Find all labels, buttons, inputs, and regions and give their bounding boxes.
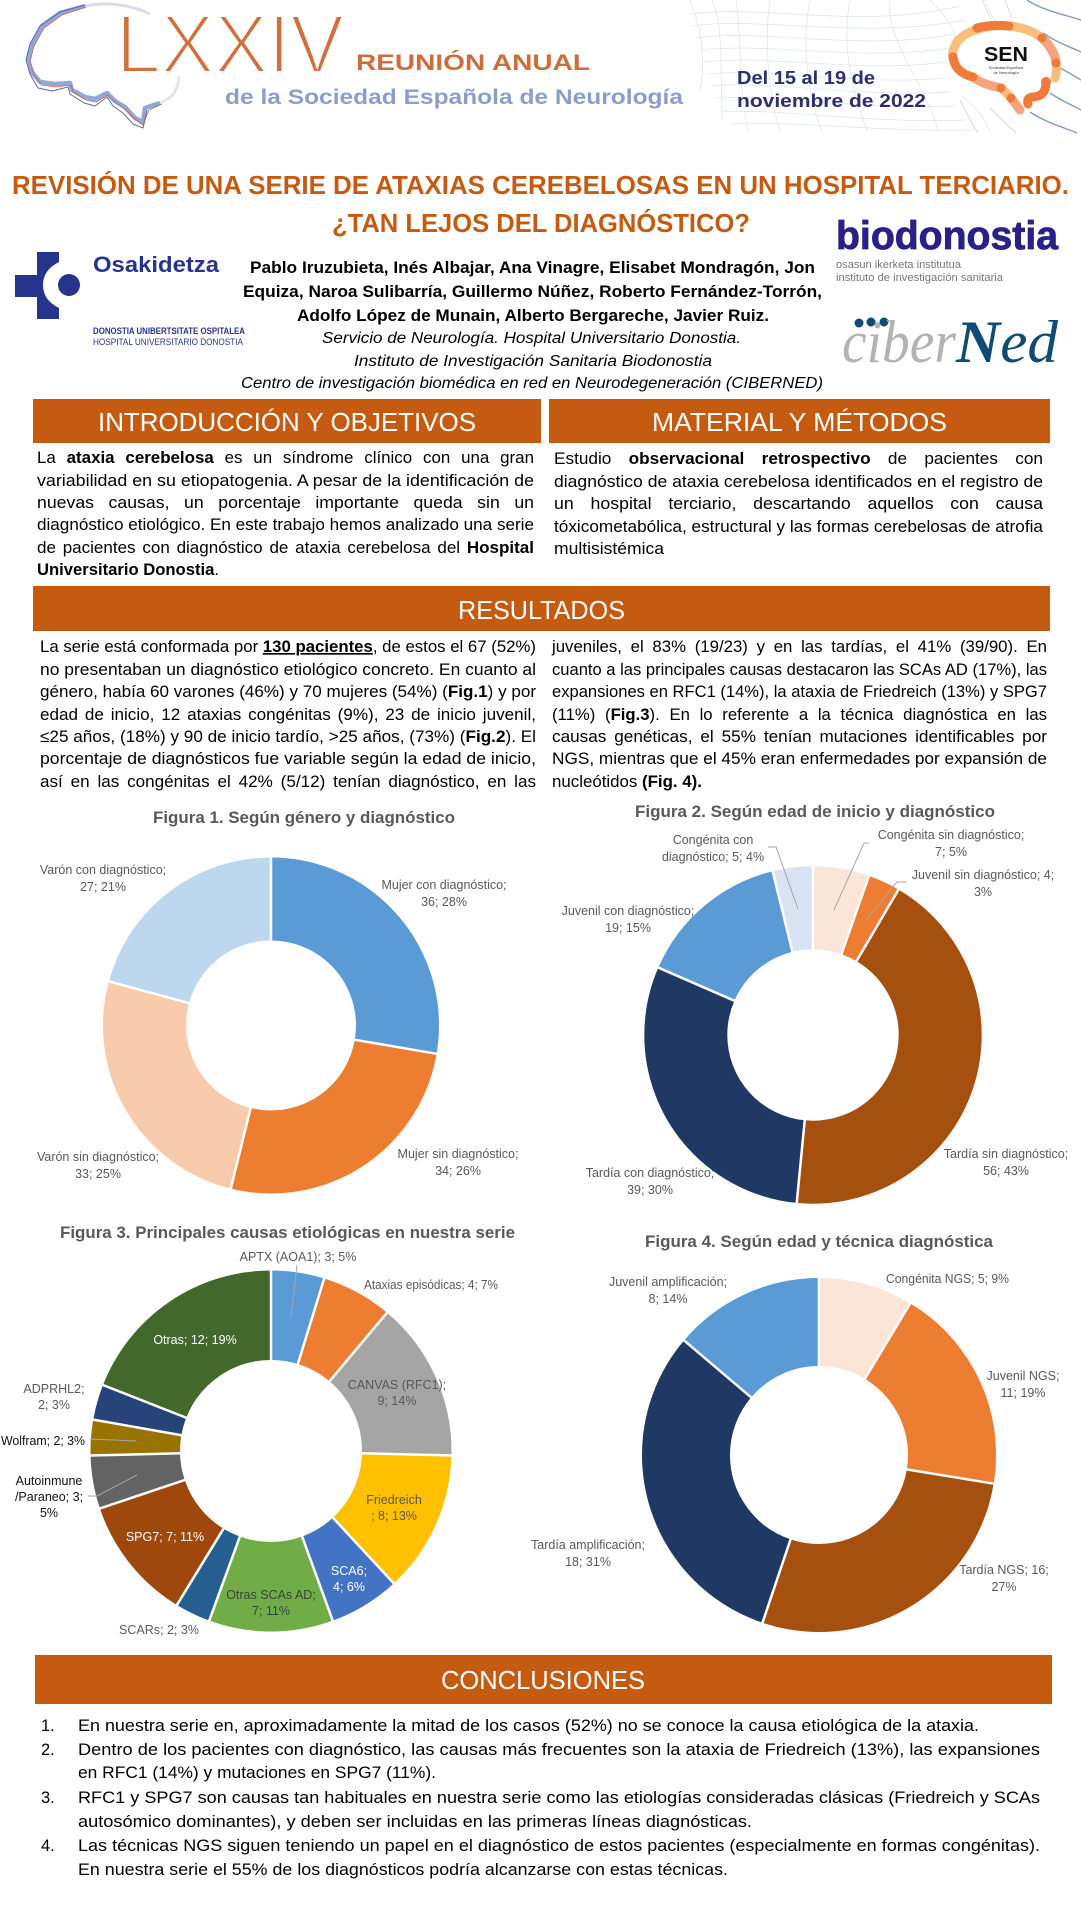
leader lines: figura 3	[88, 1265, 297, 1496]
text block: resultados right column: juveniles, el 83% (19/23) y en las tardías, el 41% (39/90). En	[551, 638, 1047, 656]
logo: SEN: de Neurología	[993, 70, 1019, 75]
conclusion 2: en RFC1 (14%) y mutaciones en SPG7 (11%).	[78, 1764, 436, 1782]
heading: introducción: INTRODUCCIÓN Y OBJETIVOS	[98, 407, 476, 437]
affiliations	[241, 330, 823, 392]
label: CANVAS: 9; 14%	[378, 1394, 416, 1408]
text block: resultados left column: así en las congénitas el 42% (5/12) tenían diagnóstico, en las	[40, 773, 536, 791]
icon: Osakidetza cross	[15, 252, 80, 319]
donut: figura 4	[683, 1277, 995, 1624]
label: SCA6: 4; 6%	[333, 1580, 365, 1594]
label: varón con diagnóstico	[40, 863, 166, 894]
text block: introducción: Universitario Donostia.	[37, 561, 219, 579]
label: tardía con diagnóstico: Tardía con diagnóstico;	[586, 1166, 714, 1180]
dates	[737, 68, 926, 111]
text block: métodos: tóxicometabólica, estructural y las formas cerebelosas de atrofia	[554, 518, 1044, 536]
logo: ciberNed: Ned	[955, 309, 1059, 375]
heading: figura 3: Figura 3. Principales causas etiológicas en nuestra serie	[60, 1223, 515, 1242]
text block: métodos: diagnóstico de ataxia cerebelosa identificados en el registro de	[554, 473, 1043, 491]
conclusion 4: 4.	[41, 1837, 55, 1855]
label: juvenil con diagnóstico	[562, 904, 694, 935]
authors	[243, 259, 822, 325]
label: tardía amplificación	[531, 1538, 645, 1569]
label: autoinmune: /Paraneo; 3;	[15, 1490, 83, 1504]
heading: conclusiones: CONCLUSIONES	[441, 1665, 645, 1695]
label: tardía sin diagnóstico: 56; 43%	[983, 1164, 1029, 1178]
dates: noviembre de 2022	[737, 91, 926, 111]
logo: biodonostia: instituto de investigación sanitaria	[836, 272, 1004, 284]
banner: congress header	[26, 0, 1081, 133]
label: tardía con diagnóstico: 39; 30%	[627, 1183, 673, 1197]
heading: resultados: RESULTADOS	[458, 595, 625, 625]
chart: figura 4	[531, 1232, 1059, 1624]
label: mujer sin diagnóstico: 34; 26%	[435, 1164, 481, 1178]
label: otras SCAs AD: 7; 11%	[252, 1604, 290, 1618]
text block: resultados right column: cuanto a las principales causas destacaron las SCAs AD (17%), las	[552, 661, 1047, 679]
label: tardía amplificación: Tardía amplificación;	[531, 1538, 645, 1552]
label: mujer con diagnóstico	[381, 878, 507, 909]
conclusion 4: En nuestra serie el 55% de los diagnósticos podría alcanzarse con estas técnicas.	[78, 1861, 728, 1879]
label: autoinmune	[15, 1474, 83, 1520]
panel: introducción y objetivos	[33, 399, 541, 579]
label: juvenil amplificación: Juvenil amplificación;	[609, 1275, 727, 1289]
text block: resultados right column: causas genéticas, el 55% tenían mutaciones identificables por	[552, 728, 1048, 746]
label: ADPRHL2: 2; 3%	[38, 1398, 70, 1412]
affiliations: Servicio de Neurología. Hospital Universitario Donostia.	[322, 330, 741, 347]
label: tardía sin diagnóstico: Tardía sin diagnóstico;	[944, 1147, 1068, 1161]
label: congénita sin diagnóstico	[878, 828, 1024, 859]
heading: figura 2: Figura 2. Según edad de inicio y diagnóstico	[635, 802, 995, 821]
label: ataxias episódicas: Ataxias episódicas; 4; 7%	[364, 1278, 498, 1292]
conclusion 4	[41, 1837, 1040, 1879]
panel: resultados	[33, 586, 1050, 791]
label: juvenil sin diagnóstico: 3%	[974, 885, 992, 899]
authors: Adolfo López de Munain, Alberto Bergareche, Javier Ruiz.	[297, 307, 769, 325]
heading: figura 1: Figura 1. Según género y diagnóstico	[153, 808, 455, 827]
panel: material y métodos	[549, 399, 1050, 558]
text block: resultados right column	[551, 638, 1048, 791]
heading: Reunión anual: REUNIÓN ANUAL	[356, 50, 590, 75]
logo: Osakidetza: DONOSTIA UNIBERTSITATE OSPITALEA	[93, 326, 245, 337]
logo: Osakidetza: HOSPITAL UNIVERSITARIO DONOSTIA	[93, 337, 244, 348]
label: juvenil con diagnóstico: 19; 15%	[605, 921, 651, 935]
text block: resultados left column: no presentaban un diagnóstico etiológico concreto. En cuanto al	[40, 661, 536, 679]
label: tardía NGS: Tardía NGS; 16;	[959, 1563, 1049, 1577]
conclusion 3	[41, 1789, 1040, 1831]
label: APTX: APTX (AOA1); 3; 5%	[240, 1250, 356, 1264]
text block: introducción	[37, 449, 534, 579]
label: juvenil con diagnóstico: Juvenil con diagnóstico;	[562, 904, 694, 918]
chart: figura 2	[562, 802, 1068, 1205]
authors: Pablo Iruzubieta, Inés Albajar, Ana Vinagre, Elisabet Mondragón, Jon	[250, 259, 815, 277]
label: SPG7: SPG7; 7; 11%	[126, 1530, 204, 1544]
donut: figura 1	[106, 855, 439, 1191]
text block: resultados left column: edad de inicio, 12 ataxias congénitas (9%), 23 de inicio juvenil,	[40, 706, 536, 724]
title: ¿TAN LEJOS DEL DIAGNÓSTICO?	[332, 208, 750, 238]
text block: resultados left column: ≤25 años, (18%) y 90 de inicio tardío, >25 años, (73%) ( Fig.2). El	[40, 728, 536, 746]
label: autoinmune: 5%	[40, 1506, 58, 1520]
heading: material y métodos	[549, 399, 1050, 443]
label: varón con diagnóstico: Varón con diagnóstico;	[40, 863, 166, 877]
subheading: society name: de la Sociedad Española de Neurología	[225, 86, 683, 109]
text block: resultados left column: género, había 60 varones (46%) y 70 mujeres (54%) ( Fig.1) y por	[40, 683, 537, 701]
label: congénita sin diagnóstico: Congénita sin diagnóstico;	[878, 828, 1024, 842]
label: autoinmune: Autoinmune	[16, 1474, 82, 1488]
text block: resultados right column: (11%) (Fig.3). En lo referente a la técnica diagnóstica en las	[552, 706, 1047, 724]
affiliations: Instituto de Investigación Sanitaria Biodonostia	[354, 353, 712, 370]
text block: resultados left column	[40, 638, 537, 791]
conclusion 2: Dentro de los pacientes con diagnóstico, las causas más frecuentes son la ataxia de Friedreich (13%), las expansiones	[78, 1741, 1040, 1759]
leader lines: figura 2	[768, 843, 906, 920]
label: juvenil sin diagnóstico: Juvenil sin diagnóstico; 4;	[912, 868, 1054, 882]
label: juvenil NGS: 11; 19%	[1001, 1386, 1045, 1400]
title: REVISIÓN DE UNA SERIE DE ATAXIAS CEREBELOSAS EN UN HOSPITAL TERCIARIO.	[12, 170, 1069, 200]
label: varón sin diagnóstico: 33; 25%	[75, 1167, 121, 1181]
label: Friedreich	[366, 1493, 422, 1523]
icon: brain outline	[26, 4, 179, 128]
dates: Del 15 al 19 de	[737, 68, 875, 88]
label: CANVAS: CANVAS (RFC1);	[348, 1378, 446, 1392]
label: tardía NGS: 27%	[991, 1580, 1017, 1594]
heading: figura 4: Figura 4. Según edad y técnica diagnóstica	[645, 1232, 994, 1251]
label: congénita con diagnóstico: diagnóstico; 5; 4%	[662, 850, 764, 864]
label: otras: Otras; 12; 19%	[153, 1333, 237, 1347]
label: mujer sin diagnóstico: Mujer sin diagnóstico;	[398, 1147, 518, 1161]
conclusion 1: 1.	[41, 1717, 55, 1735]
text block: resultados right column: nucleótidos (Fig. 4).	[552, 773, 702, 791]
logo: Osakidetza	[15, 252, 245, 348]
text block: métodos: multisistémica	[554, 540, 665, 558]
text block: introducción: diagnóstico etiológico. En este trabajo hemos analizado una serie	[37, 516, 534, 534]
label: mujer con diagnóstico: 36; 28%	[421, 895, 467, 909]
label: juvenil amplificación: 8; 14%	[649, 1292, 687, 1306]
conclusion 4: Las técnicas NGS siguen teniendo un papel en el diagnóstico de estos pacientes (especialmente en formas congénitas).	[78, 1837, 1040, 1855]
banner wave background	[690, 0, 1081, 133]
label: congénita con diagnóstico: Congénita con	[673, 833, 753, 847]
label: juvenil NGS	[987, 1369, 1059, 1400]
label: SCA6	[331, 1564, 367, 1594]
text block: introducción: variabilidad en su etiopatogenia. A pesar de la identificación de	[37, 472, 534, 490]
logo: biodonostia: osasun ikerketa institutua	[836, 259, 962, 271]
label: CANVAS	[348, 1378, 446, 1408]
conclusion 3: autosómico dominantes), y deben ser incluidas en las primeras líneas diagnósticas.	[78, 1813, 752, 1831]
label: varón sin diagnóstico: Varón sin diagnóstico;	[37, 1150, 159, 1164]
logo: biodonostia: biodonostia	[836, 214, 1059, 258]
conclusion 2: 2.	[41, 1741, 55, 1759]
label: otras SCAs AD: Otras SCAs AD;	[226, 1588, 316, 1602]
donut: figura 3	[89, 1269, 453, 1622]
label: mujer sin diagnóstico	[398, 1147, 518, 1178]
chart: figura 3	[1, 1223, 515, 1637]
text block: métodos: Estudio observacional retrospectivo de pacientes con	[554, 450, 1043, 468]
title	[12, 170, 1069, 238]
text block: métodos: un hospital terciario, descartando aquellos con causa	[554, 495, 1044, 513]
label: tardía con diagnóstico	[586, 1166, 714, 1197]
label: tardía amplificación: 18; 31%	[565, 1555, 611, 1569]
logo: SEN: SEN	[984, 44, 1028, 66]
authors: Equiza, Naroa Sulibarría, Guillermo Núñez, Roberto Fernández-Torrón,	[243, 283, 822, 301]
text block: métodos	[554, 450, 1044, 558]
text block: introducción: nuevas causas, un porcentaje importante queda sin un	[37, 494, 534, 512]
label: tardía NGS	[959, 1563, 1049, 1594]
label: Friedreich: ; 8; 13%	[371, 1509, 417, 1523]
logo: ciberNed	[842, 309, 1059, 375]
text block: resultados right column: expansiones en RFC1 (14%), la ataxia de Friedreich (13%) y SPG7	[552, 683, 1047, 701]
text block: resultados right column: NGS, mientras que el 45% eran enfermedades por expansión de	[552, 750, 1047, 768]
conclusion 2	[41, 1741, 1040, 1782]
label: mujer con diagnóstico: Mujer con diagnóstico;	[381, 878, 507, 892]
logo: biodonostia	[836, 214, 1059, 284]
label: congénita sin diagnóstico: 7; 5%	[935, 845, 967, 859]
label: juvenil NGS: Juvenil NGS;	[987, 1369, 1059, 1383]
conclusion 1: En nuestra serie en, aproximadamente la mitad de los casos (52%) no se conoce la causa etiológica de la ataxia.	[78, 1717, 979, 1735]
conclusion 3: 3.	[41, 1789, 55, 1807]
text block: resultados left column: La serie está conformada por 130 pacientes, de estos el 67 (52%)	[40, 638, 536, 656]
text block: introducción: La ataxia cerebelosa es un síndrome clínico con una gran	[37, 449, 534, 467]
logo: SEN	[948, 22, 1060, 110]
logo: Osakidetza: Osakidetza	[93, 252, 220, 277]
conclusion 3: RFC1 y SPG7 son causas tan habituales en nuestra serie como las etiologías consideradas clásicas (Friedreich y SCAs	[78, 1789, 1040, 1807]
heading: resultados	[33, 586, 1050, 631]
heading: conclusiones	[35, 1655, 1052, 1704]
text block: introducción: de pacientes con diagnóstico de ataxia cerebelosa del Hospital	[37, 539, 534, 557]
panel: conclusiones	[35, 1655, 1052, 1879]
label: varón sin diagnóstico	[37, 1150, 159, 1181]
heading: introducción	[33, 399, 541, 443]
heading: material y métodos: MATERIAL Y MÉTODOS	[652, 407, 947, 437]
donut: figura 2	[656, 864, 940, 1205]
logo: ciberNed: ciber	[842, 309, 957, 375]
label: otras SCAs AD	[226, 1588, 316, 1618]
label: juvenil amplificación	[609, 1275, 727, 1306]
label: ADPRHL2: ADPRHL2;	[23, 1382, 85, 1396]
label: congénita con diagnóstico	[662, 833, 764, 864]
label: ADPRHL2	[23, 1382, 85, 1412]
label: juvenil sin diagnóstico	[912, 868, 1054, 899]
label: SCARs: SCARs; 2; 3%	[119, 1623, 199, 1637]
label: varón con diagnóstico: 27; 21%	[80, 880, 126, 894]
label: Wolfram: Wolfram; 2; 3%	[1, 1434, 85, 1448]
label: tardía sin diagnóstico	[944, 1147, 1068, 1178]
label: congénita NGS: Congénita NGS; 5; 9%	[886, 1272, 1009, 1286]
text block: resultados left column: porcentaje de diagnósticos fue variable según la edad de inicio,	[40, 750, 536, 768]
chart: figura 1	[37, 808, 518, 1191]
affiliations: Centro de investigación biomédica en red en Neurodegeneración (CIBERNED)	[241, 375, 823, 392]
logo: SEN: Sociedad Española	[989, 65, 1024, 70]
label: Friedreich: Friedreich	[366, 1493, 422, 1507]
label: SCA6: SCA6;	[331, 1564, 367, 1578]
heading: LXXIV: LXXIV	[116, 0, 344, 90]
